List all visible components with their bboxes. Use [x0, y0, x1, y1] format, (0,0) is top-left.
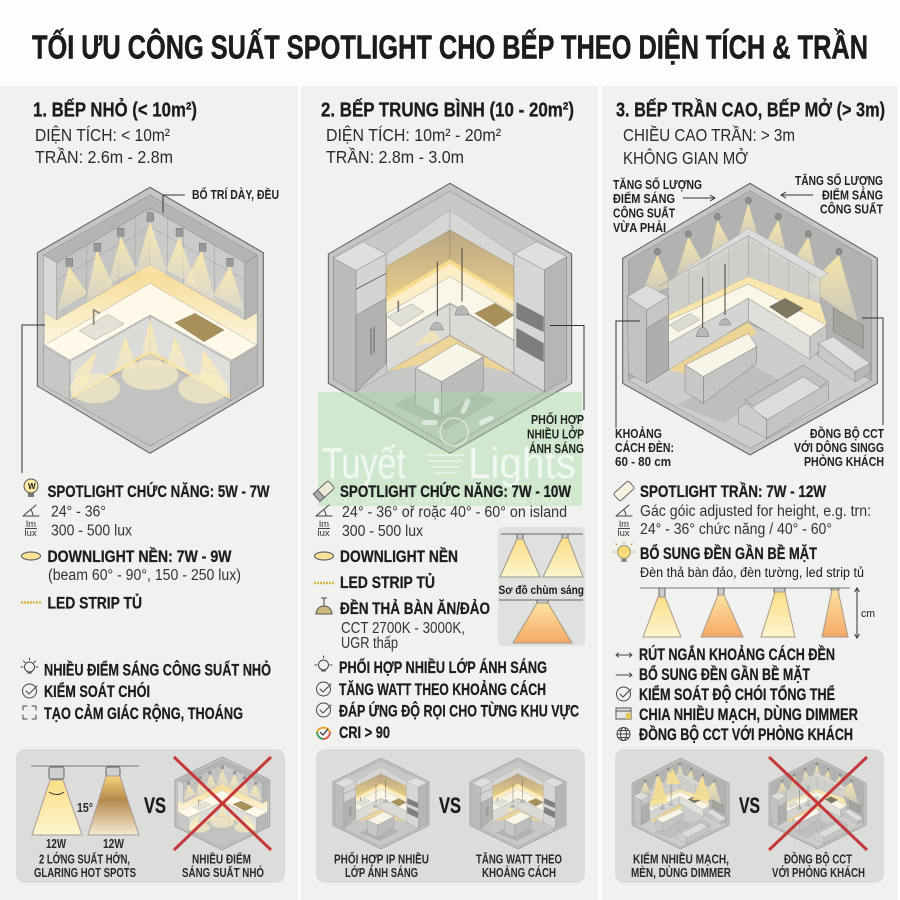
beam strip diagram: cm [861, 608, 875, 620]
beam angle value: 24° - 36° [51, 504, 106, 520]
caption: rejected layout: SÁNG SUẤT NHỎ [182, 865, 264, 880]
spotlight spec: 24° - 36° chức năng / 40° - 60° [640, 521, 832, 538]
downlight spec: (beam 60° - 90°, 150 - 250 lux) [48, 567, 241, 584]
icon: dimmer panel [616, 708, 631, 719]
heading: small kitchen: 1. BẾP NHỎ (< 10m²) [33, 98, 197, 122]
icon: lux: lux [24, 528, 37, 539]
downlight spec [48, 547, 241, 584]
benefits list: medium kitchen: CRI > 90 [339, 724, 390, 742]
thumbnail: layered light [333, 758, 429, 849]
caption: rejected layout: NHIỀU ĐIỂM [192, 852, 251, 866]
red cross [174, 757, 271, 850]
callout: spacing: CÁCH ĐÈN: [615, 440, 674, 455]
beam diagram box [498, 527, 585, 646]
benefits list: small kitchen [44, 660, 271, 723]
specs: medium kitchen [326, 125, 501, 167]
vs: VS [739, 793, 760, 818]
spotlight spec: SPOTLIGHT CHỨC NĂNG: 5W - 7W [48, 482, 270, 501]
icon: lux [24, 519, 37, 539]
callout: more points left: VỪA PHẢI [613, 220, 666, 235]
benefits list: medium kitchen: PHỐI HỢP NHIỀU LỚP ÁNH SÁNG [339, 657, 547, 677]
callout: spacing: KHOẢNG [615, 426, 662, 441]
downlight label: DOWNLIGHT NỀN [340, 547, 458, 566]
pendant spec: ĐỀN THẢ BÀN ĂN/ĐẢO [340, 599, 490, 618]
specs: small kitchen: TRẦN: 2.6m - 2.8m [35, 146, 173, 167]
callout: more points right: CÔNG SUẤT [820, 202, 883, 216]
pendant spec: CCT 2700K - 3000K, [341, 620, 465, 637]
benefits list: medium kitchen: TĂNG WATT THEO KHOẢNG CÁCH [339, 680, 546, 699]
comparison box: small kitchen [16, 749, 285, 883]
icon: lux [318, 519, 330, 539]
captions: VỚI PHÒNG KHÁCH [772, 865, 865, 880]
thumbnail: rejected layout [175, 757, 270, 850]
callout: more points right: ĐIỂM SÁNG [822, 188, 883, 202]
specs: small kitchen: DIỆN TÍCH: < 10m² [35, 125, 170, 145]
benefits list: small kitchen: NHIỀU ĐIỂM SÁNG CÔNG SUẤT NHỎ [44, 660, 271, 680]
icon: beam angle [316, 505, 332, 516]
callout: spacing: 60 - 80 cm [615, 455, 671, 469]
callout: sync CCT: ĐỒNG BỘ CCT [810, 426, 884, 441]
surface lights spec [640, 544, 864, 580]
watermark: Đơn giản · Thông minh · Chất lượng [328, 494, 572, 506]
panel: medium kitchen [301, 86, 598, 900]
lux value: 300 - 500 lux [342, 523, 423, 540]
icon: CRI ring [317, 728, 330, 739]
captions [334, 852, 562, 880]
callout: more points right [781, 173, 883, 216]
icon: spotlight tube [313, 481, 335, 501]
icon: check [616, 687, 631, 701]
red cross [769, 757, 867, 850]
thumbnail: rejected open kitchen [769, 758, 866, 849]
watermark: Lights [468, 439, 576, 488]
icon: led strip [314, 582, 334, 584]
icon: lux: lm [26, 519, 36, 530]
spotlight spec [640, 482, 871, 538]
icon: bulb W: W [28, 482, 36, 491]
actions list: high ceiling: KIỂM SOÁT ĐỘ CHÓI TỔNG THỂ [639, 685, 835, 704]
icon: lux: lux [618, 528, 630, 539]
callout: more points left: CÔNG SUẤT [613, 206, 675, 220]
vs: VS [144, 793, 166, 818]
icon: lux [618, 519, 630, 539]
benefits list: small kitchen: TẠO CẢM GIÁC RỘNG, THOÁNG [44, 704, 243, 723]
icon: led strip [21, 601, 41, 604]
captions: MÈN, DÙNG DIMMER [631, 865, 731, 880]
icon: small bulb [21, 658, 38, 673]
icon: beam angle [616, 505, 632, 516]
heading: medium kitchen: 2. BẾP TRUNG BÌNH (10 - 20m²) [321, 98, 574, 122]
benefits list: medium kitchen [339, 657, 579, 742]
icon: downlight [314, 552, 334, 560]
specs: small kitchen [35, 125, 173, 167]
icon: expand [23, 706, 36, 719]
panel: small kitchen [0, 86, 298, 900]
specs: high ceiling: KHÔNG GIAN MỞ [623, 147, 748, 168]
callout: layered light: PHỐI HỢP [531, 412, 584, 427]
panel: high ceiling kitchen [602, 86, 897, 900]
illustration: medium kitchen isometric [328, 183, 572, 453]
surface lights spec: BỔ SUNG ĐỀN GẦN BỀ MẶT [640, 544, 817, 563]
icon: glowing bulb [613, 542, 635, 562]
watermark [318, 392, 582, 506]
thumbnail: circuits [632, 758, 729, 849]
icons: arrows [616, 653, 632, 677]
beam angle value: 24° - 36° oř roặc 40° - 60° on island [342, 504, 567, 521]
callout: layered light: NHIỀU LỚP [527, 426, 584, 442]
captions: TĂNG WATT THEO [476, 852, 562, 866]
led strip label: LED STRIP TỦ [340, 573, 435, 592]
captions: KIỂM NHIỀU MẠCH, [633, 852, 729, 866]
captions: LỚP ÁNH SÁNG [345, 865, 418, 880]
pendant spec: UGR thấp [341, 635, 398, 652]
diagram labels: 12W [46, 837, 66, 851]
icon: lux: lux [318, 528, 330, 539]
diagram labels: 2 LỚNG SUẤT HỚN, [39, 852, 130, 866]
caption: rejected layout [182, 852, 264, 880]
actions list: high ceiling: RÚT NGẮN KHOẢNG CÁCH ĐỀN [639, 645, 835, 664]
icon: pendant [316, 598, 332, 614]
callout: sync CCT: VỚI DÔNG SINGG [794, 440, 884, 455]
captions: PHỐI HỢP IP NHIỀU [334, 852, 429, 866]
thumbnail: higher watt [470, 758, 566, 849]
spotlight spec: SPOTLIGHT TRẦN: 7W - 12W [640, 482, 826, 501]
thumbnail glow: three spot beams [650, 768, 711, 806]
spotlight spec: Gác góic adjusted for height, e.g. trn: [640, 503, 871, 520]
diagram labels [34, 801, 136, 880]
benefits list: small kitchen: KIỂM SOÁT CHÓI [44, 682, 150, 701]
illustration: open kitchen isometric [623, 183, 877, 455]
beam diagram: two spots [32, 767, 139, 835]
lux value: 300 - 500 lux [51, 522, 132, 540]
comparison box: medium kitchen [316, 749, 585, 883]
callout: layered light: ÁNH SÁNG [529, 441, 584, 456]
captions [631, 852, 865, 880]
illustration: small kitchen isometric [37, 187, 263, 453]
icon: lux: lm [319, 519, 329, 530]
watermark: Tuyết [322, 439, 406, 488]
callout: more points left [613, 177, 715, 235]
captions: KHOẢNG CÁCH [482, 865, 556, 880]
icons: checks [316, 682, 331, 717]
specs: medium kitchen: DIỆN TÍCH: 10m² - 20m² [326, 125, 501, 145]
callout: dense layout: BỐ TRÍ DÀY, ĐỀU [192, 187, 279, 202]
surface lights spec: Đèn thả bàn đảo, đèn tường, led strip tủ [640, 565, 864, 580]
icon: spotlight tube [613, 481, 635, 501]
callout: layered light [527, 326, 584, 456]
callout: sync CCT: PHÒNG KHÁCH [804, 454, 884, 469]
icon: small bulb [315, 656, 332, 671]
benefits list: medium kitchen: ĐÁP ỨNG ĐỘ RỌI CHO TỪNG KHU VỰC [339, 702, 579, 720]
icon: check [22, 684, 37, 698]
captions: ĐỒNG BỘ CCT [784, 852, 852, 866]
diagram labels: 15° [77, 801, 93, 815]
led strip label: LED STRIP TỦ [48, 594, 142, 612]
callout: more points left: ĐIỂM SÁNG [613, 191, 675, 206]
specs: medium kitchen: TRẦN: 2.8m - 3.0m [326, 146, 464, 167]
downlight spec: DOWNLIGHT NỀN: 7W - 9W [48, 547, 232, 566]
callout: more points left: TĂNG SỐ LƯỢNG [613, 177, 702, 192]
diagram labels: GLARING HOT SPOTS [34, 866, 136, 880]
icon: bulb W [24, 479, 38, 497]
specs: high ceiling [623, 124, 795, 168]
actions list: high ceiling: BỔ SUNG ĐỀN GẦN BỀ MẶT [639, 665, 810, 684]
callout: more points right: TĂNG SỐ LƯỢNG [795, 173, 883, 188]
icon: beam angle [23, 505, 39, 516]
comparison box: high ceiling [615, 749, 884, 883]
diagram labels: 12W [103, 837, 124, 851]
icon: globe [617, 728, 630, 740]
callout: dense layout [22, 187, 279, 473]
vs: VS [439, 793, 461, 818]
icon: lux: lm [619, 519, 629, 530]
callout: spacing [615, 321, 674, 469]
callout: sync CCT [794, 318, 884, 469]
pendant spec [340, 599, 490, 652]
specs: high ceiling: CHIỀU CAO TRẦN: > 3m [623, 124, 795, 145]
icon: downlight [22, 552, 40, 560]
actions list: high ceiling [639, 645, 858, 744]
beam diagram box: Sơ đồ chùm sáng [498, 585, 584, 597]
beam strip diagram [640, 588, 875, 638]
spotlight spec: SPOTLIGHT CHỨC NĂNG: 7W - 10W [340, 482, 571, 501]
